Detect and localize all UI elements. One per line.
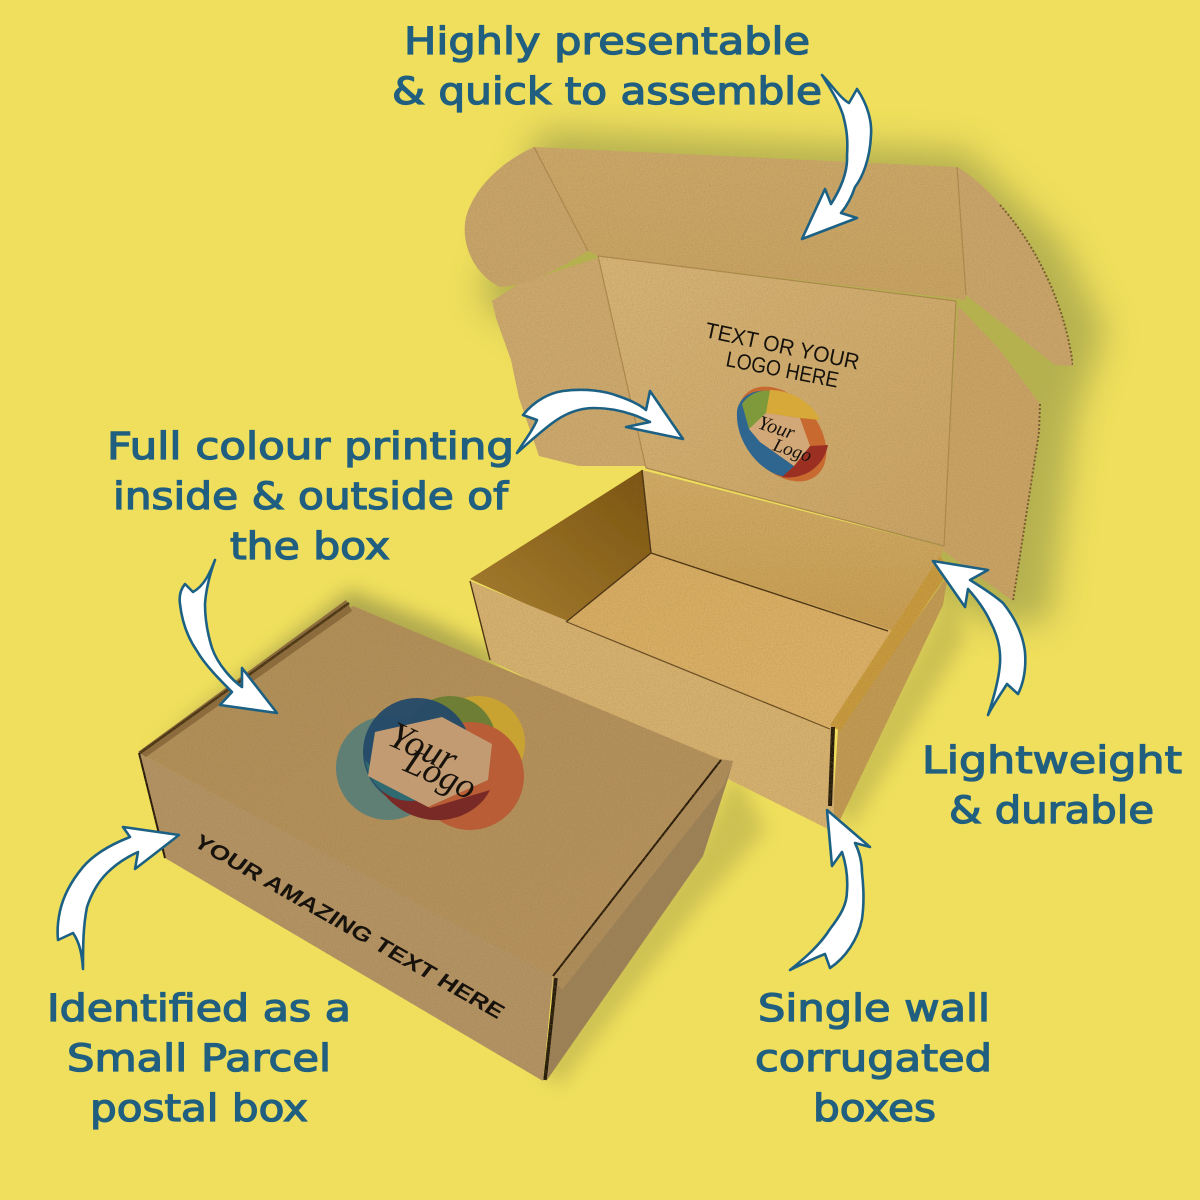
lid fold lines (534, 147, 966, 546)
heading: identified as a small parcel (47, 987, 351, 1130)
heading: identified as a small parcel: Identified as a (47, 987, 351, 1030)
box edge dark lines (470, 470, 888, 660)
lid print: text or your logo: TEXT OR YOUR (703, 317, 862, 375)
lid logo: Your (755, 412, 798, 444)
right ear of upper lid flap (957, 167, 1073, 366)
heading: highly presentable: Highly presentable (404, 20, 810, 63)
corrugated edge (1000, 205, 1073, 601)
rear hinge strip (138, 600, 352, 757)
closed box side print text: YOUR AMAZING TEXT HERE (189, 831, 509, 1023)
heading: full colour printing: the box (230, 525, 390, 568)
lid edge lines (139, 753, 721, 976)
corner seam (830, 727, 833, 806)
heading: identified as a small parcel: postal box (90, 1087, 308, 1130)
front corner seam (545, 978, 556, 1080)
hinge dark line (140, 603, 349, 753)
heading: identified as a small parcel: Small Parcel (67, 1037, 331, 1080)
arrow: to lid print (517, 390, 683, 453)
heading: lightweight and durable (922, 739, 1182, 832)
closed box (138, 600, 733, 1081)
open box (465, 147, 1073, 832)
lower left lid ear (492, 258, 646, 466)
soft shadows behind boxes (150, 130, 1105, 1085)
heading: highly presentable (392, 20, 822, 113)
arrow: to upper lid (802, 75, 871, 239)
arrow: to closed box side (58, 827, 179, 969)
right outer wall (832, 575, 948, 825)
closed box logo: Logo (398, 740, 483, 807)
lid skirt (553, 759, 733, 990)
left inner wall (470, 470, 651, 622)
heading: single wall corrugated boxes: Single wall (758, 987, 990, 1030)
heading: lightweight and durable: & durable (949, 789, 1154, 832)
heading: full colour printing: inside & outside of (113, 475, 509, 518)
front face (139, 753, 553, 1081)
lid logo: Logo (770, 434, 814, 467)
back wall (642, 470, 944, 631)
lid logo (720, 369, 844, 499)
heading: single wall corrugated boxes (755, 987, 992, 1130)
front outer wall (470, 581, 834, 832)
arrow: to box corner (790, 810, 870, 970)
closed box logo (336, 696, 525, 830)
closed box logo: Your (382, 714, 464, 781)
heading: full colour printing (107, 425, 514, 568)
heading: full colour printing: Full colour printing (107, 425, 514, 468)
top rim of right wall (830, 556, 950, 731)
inner lid panel (598, 256, 956, 546)
lower right lid ear (942, 306, 1040, 601)
heading: single wall corrugated boxes: boxes (813, 1087, 936, 1130)
lid print: text or your logo: LOGO HERE (724, 346, 841, 393)
heading: lightweight and durable: Lightweight (922, 739, 1182, 782)
right side face (547, 761, 733, 1080)
heading: single wall corrugated boxes: corrugated (755, 1037, 992, 1080)
arrow: to closed box top (180, 560, 277, 713)
left ear of upper lid flap (465, 147, 588, 287)
arrow: to box rim (933, 561, 1025, 715)
floor (566, 553, 893, 729)
top face (139, 606, 722, 977)
upper lid panel (534, 147, 966, 300)
heading: highly presentable: & quick to assemble (392, 70, 822, 113)
